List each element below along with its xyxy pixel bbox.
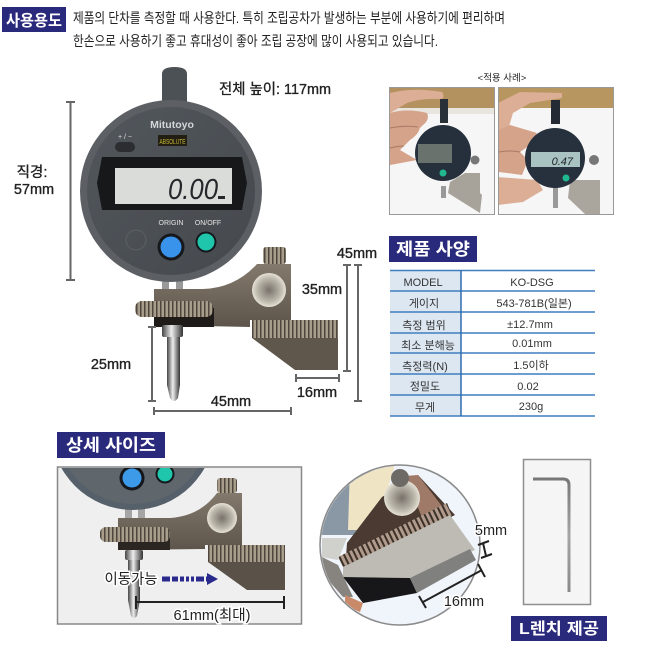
plus minus switch: + / − — [118, 134, 132, 141]
dimension: 16mm width: 16mm — [297, 385, 337, 401]
dimension: 45mm width — [154, 394, 291, 415]
photo frame: left — [390, 88, 494, 214]
usage description text: 제품의 단차를 측정할 때 사용한다. 특히 조립공차가 발생하는 부분에 사용하기에 편리하며 — [73, 10, 505, 26]
row: force: 측정력(N) — [402, 360, 448, 373]
dimension: diameter label: 57mm — [14, 182, 54, 198]
dimension: 16mm — [419, 564, 485, 610]
row: weight — [415, 401, 543, 414]
knurled screw — [263, 247, 286, 264]
dimension: 16mm width — [296, 374, 339, 401]
dimension: 25mm rod: 25mm — [91, 357, 131, 373]
row: weight: 230g — [519, 401, 543, 413]
row: gauge — [409, 296, 572, 310]
label: L렌치 제공 — [511, 616, 607, 641]
photo: left usage example — [390, 88, 494, 214]
row: model: MODEL — [403, 277, 443, 289]
knurled wheel — [135, 301, 213, 317]
contact rod — [162, 325, 183, 401]
bracket hole — [207, 503, 237, 533]
lcd screen — [115, 168, 232, 206]
product photo: digital gauge with step attachment — [80, 67, 338, 401]
gauge bottom — [62, 468, 204, 510]
brand name: Mitutoyo — [150, 119, 194, 131]
wheel — [100, 527, 170, 542]
absolute badge — [158, 135, 187, 146]
heading: 사용용도: 사용용도 — [6, 12, 62, 30]
panel: detail size — [56, 466, 302, 625]
dimension: 61mm — [136, 596, 284, 624]
row: model — [403, 277, 554, 289]
dimension: 35mm height — [302, 265, 351, 371]
row: weight: 무게 — [415, 401, 435, 414]
button labels: ORIGIN — [159, 220, 183, 227]
heading: 제품 사양: 제품 사양 — [396, 240, 470, 259]
rod — [125, 550, 143, 618]
specification table — [390, 270, 595, 416]
heading: 상세 사이즈 — [57, 432, 165, 458]
dimension: 45mm width: 45mm — [211, 394, 251, 410]
photo: right usage example: 0.47 — [552, 156, 574, 168]
gauge dial body — [80, 100, 262, 282]
caption: usage examples: <적용 사례> — [478, 72, 527, 84]
dimension: 45mm height: 45mm — [337, 246, 377, 262]
gauge dial body: ON/OFF — [195, 220, 221, 227]
toothed foot — [208, 545, 285, 590]
absolute badge: ABSOLUTE — [160, 139, 186, 146]
usage description text — [73, 10, 505, 49]
row: accuracy: 정밀도 — [410, 380, 440, 393]
screw head — [391, 469, 409, 487]
row: force: 1.5이하 — [513, 358, 549, 372]
dimension: total height: 전체 높이: 117mm — [219, 81, 331, 98]
magnified circle: foot detail — [320, 465, 507, 625]
dimension: 5mm — [475, 523, 507, 558]
photo frame: right — [498, 88, 614, 214]
usage description text: 한손으로 사용하기 좋고 휴대성이 좋아 조립 공장에 많이 사용되고 있습니다. — [73, 33, 438, 49]
label: L렌치 제공: L렌치 제공 — [519, 620, 599, 638]
heading: 제품 사양 — [389, 236, 477, 262]
row: resolution: 0.01mm — [512, 338, 552, 350]
row: gauge: 543-781B(일본) — [496, 296, 572, 310]
plus minus switch — [115, 134, 135, 152]
row: accuracy — [410, 380, 539, 393]
row: model: KO-DSG — [510, 277, 554, 289]
dimension: 61mm: 61mm(최대) — [174, 607, 250, 624]
icon: L wrench — [533, 479, 569, 592]
row: accuracy: 0.02 — [517, 381, 539, 393]
movable label: 이동가능 — [104, 571, 158, 588]
bracket — [118, 493, 242, 550]
hole in bracket — [252, 273, 286, 307]
lower bracket — [154, 264, 291, 327]
movement arrow — [162, 573, 218, 585]
dimension: 35mm height: 35mm — [302, 282, 342, 298]
dimension line: diameter — [66, 102, 75, 280]
dimension: 16mm: 16mm — [444, 594, 484, 610]
heading: 상세 사이즈: 상세 사이즈 — [66, 436, 156, 455]
heading: 사용용도 — [2, 7, 66, 32]
row: resolution — [401, 338, 552, 352]
screw — [217, 478, 237, 493]
photo: right usage example — [498, 88, 613, 214]
dimension: diameter label — [14, 164, 54, 198]
panel: L wrench photo — [524, 460, 590, 604]
row: range: ±12.7mm — [507, 319, 553, 331]
dimension: 45mm height — [337, 246, 377, 401]
dimension: 5mm: 5mm — [475, 523, 507, 539]
teeth row — [338, 503, 452, 567]
row: force — [402, 358, 549, 373]
lcd screen: 0.00 — [168, 174, 218, 206]
dimension: 25mm rod — [91, 327, 156, 401]
top face of foot — [343, 515, 475, 578]
row: range — [402, 319, 553, 332]
toothed foot — [252, 320, 338, 370]
dimension: diameter label: 직경: — [17, 164, 47, 181]
polished hole — [384, 480, 420, 516]
row: resolution: 최소 분해능 — [401, 338, 455, 352]
row: gauge: 게이지 — [409, 297, 439, 310]
blue origin button — [158, 234, 184, 260]
gauge top stem — [162, 67, 187, 102]
label column background — [390, 270, 461, 416]
row: range: 측정 범위 — [402, 319, 446, 332]
front steel face — [410, 549, 476, 593]
green on/off button — [196, 232, 216, 252]
lcd frame — [97, 157, 247, 210]
black side face — [343, 577, 417, 603]
